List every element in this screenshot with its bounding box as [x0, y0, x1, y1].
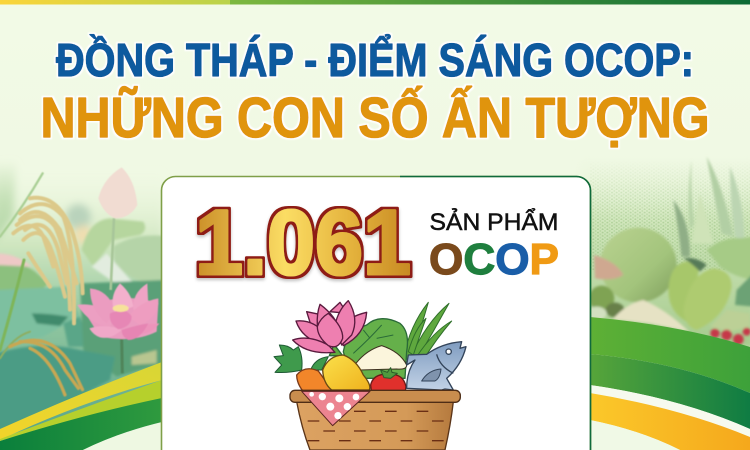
title [40, 34, 710, 150]
pink fish slice [594, 255, 623, 279]
cabbage leaf [343, 319, 407, 378]
rice stalks [0, 173, 83, 395]
carrot greens [274, 345, 302, 373]
red berries [710, 328, 750, 345]
green melon [600, 228, 677, 302]
basket body [297, 402, 453, 450]
big number: 1.061 [195, 192, 411, 294]
fish [407, 342, 466, 390]
icon: produce basket [274, 301, 466, 450]
left artwork: lotus and rice [0, 160, 163, 437]
top colour bar [0, 0, 750, 4]
main card [162, 176, 590, 450]
tall leaves [673, 157, 744, 257]
small moss [589, 286, 614, 311]
tomato [371, 374, 406, 391]
green peppers [668, 262, 699, 323]
rice mound [356, 346, 407, 370]
green onions [403, 302, 452, 360]
checked cloth [302, 391, 370, 426]
left swoosh bands [0, 362, 162, 450]
carrot [297, 369, 333, 392]
lotus [293, 301, 367, 356]
right swoosh bands [590, 317, 750, 450]
lotus bud [98, 167, 137, 290]
white mound [613, 300, 689, 332]
right artwork: field and fruit [589, 158, 750, 347]
pink lotus flower [77, 283, 159, 373]
label: san pham: SẢN PHẨM [430, 207, 558, 236]
leafy garnish [710, 310, 750, 332]
mango [323, 355, 370, 390]
basket rim [290, 390, 460, 402]
lily pads [0, 218, 163, 433]
OCOP logo text: OCOP [429, 235, 559, 284]
